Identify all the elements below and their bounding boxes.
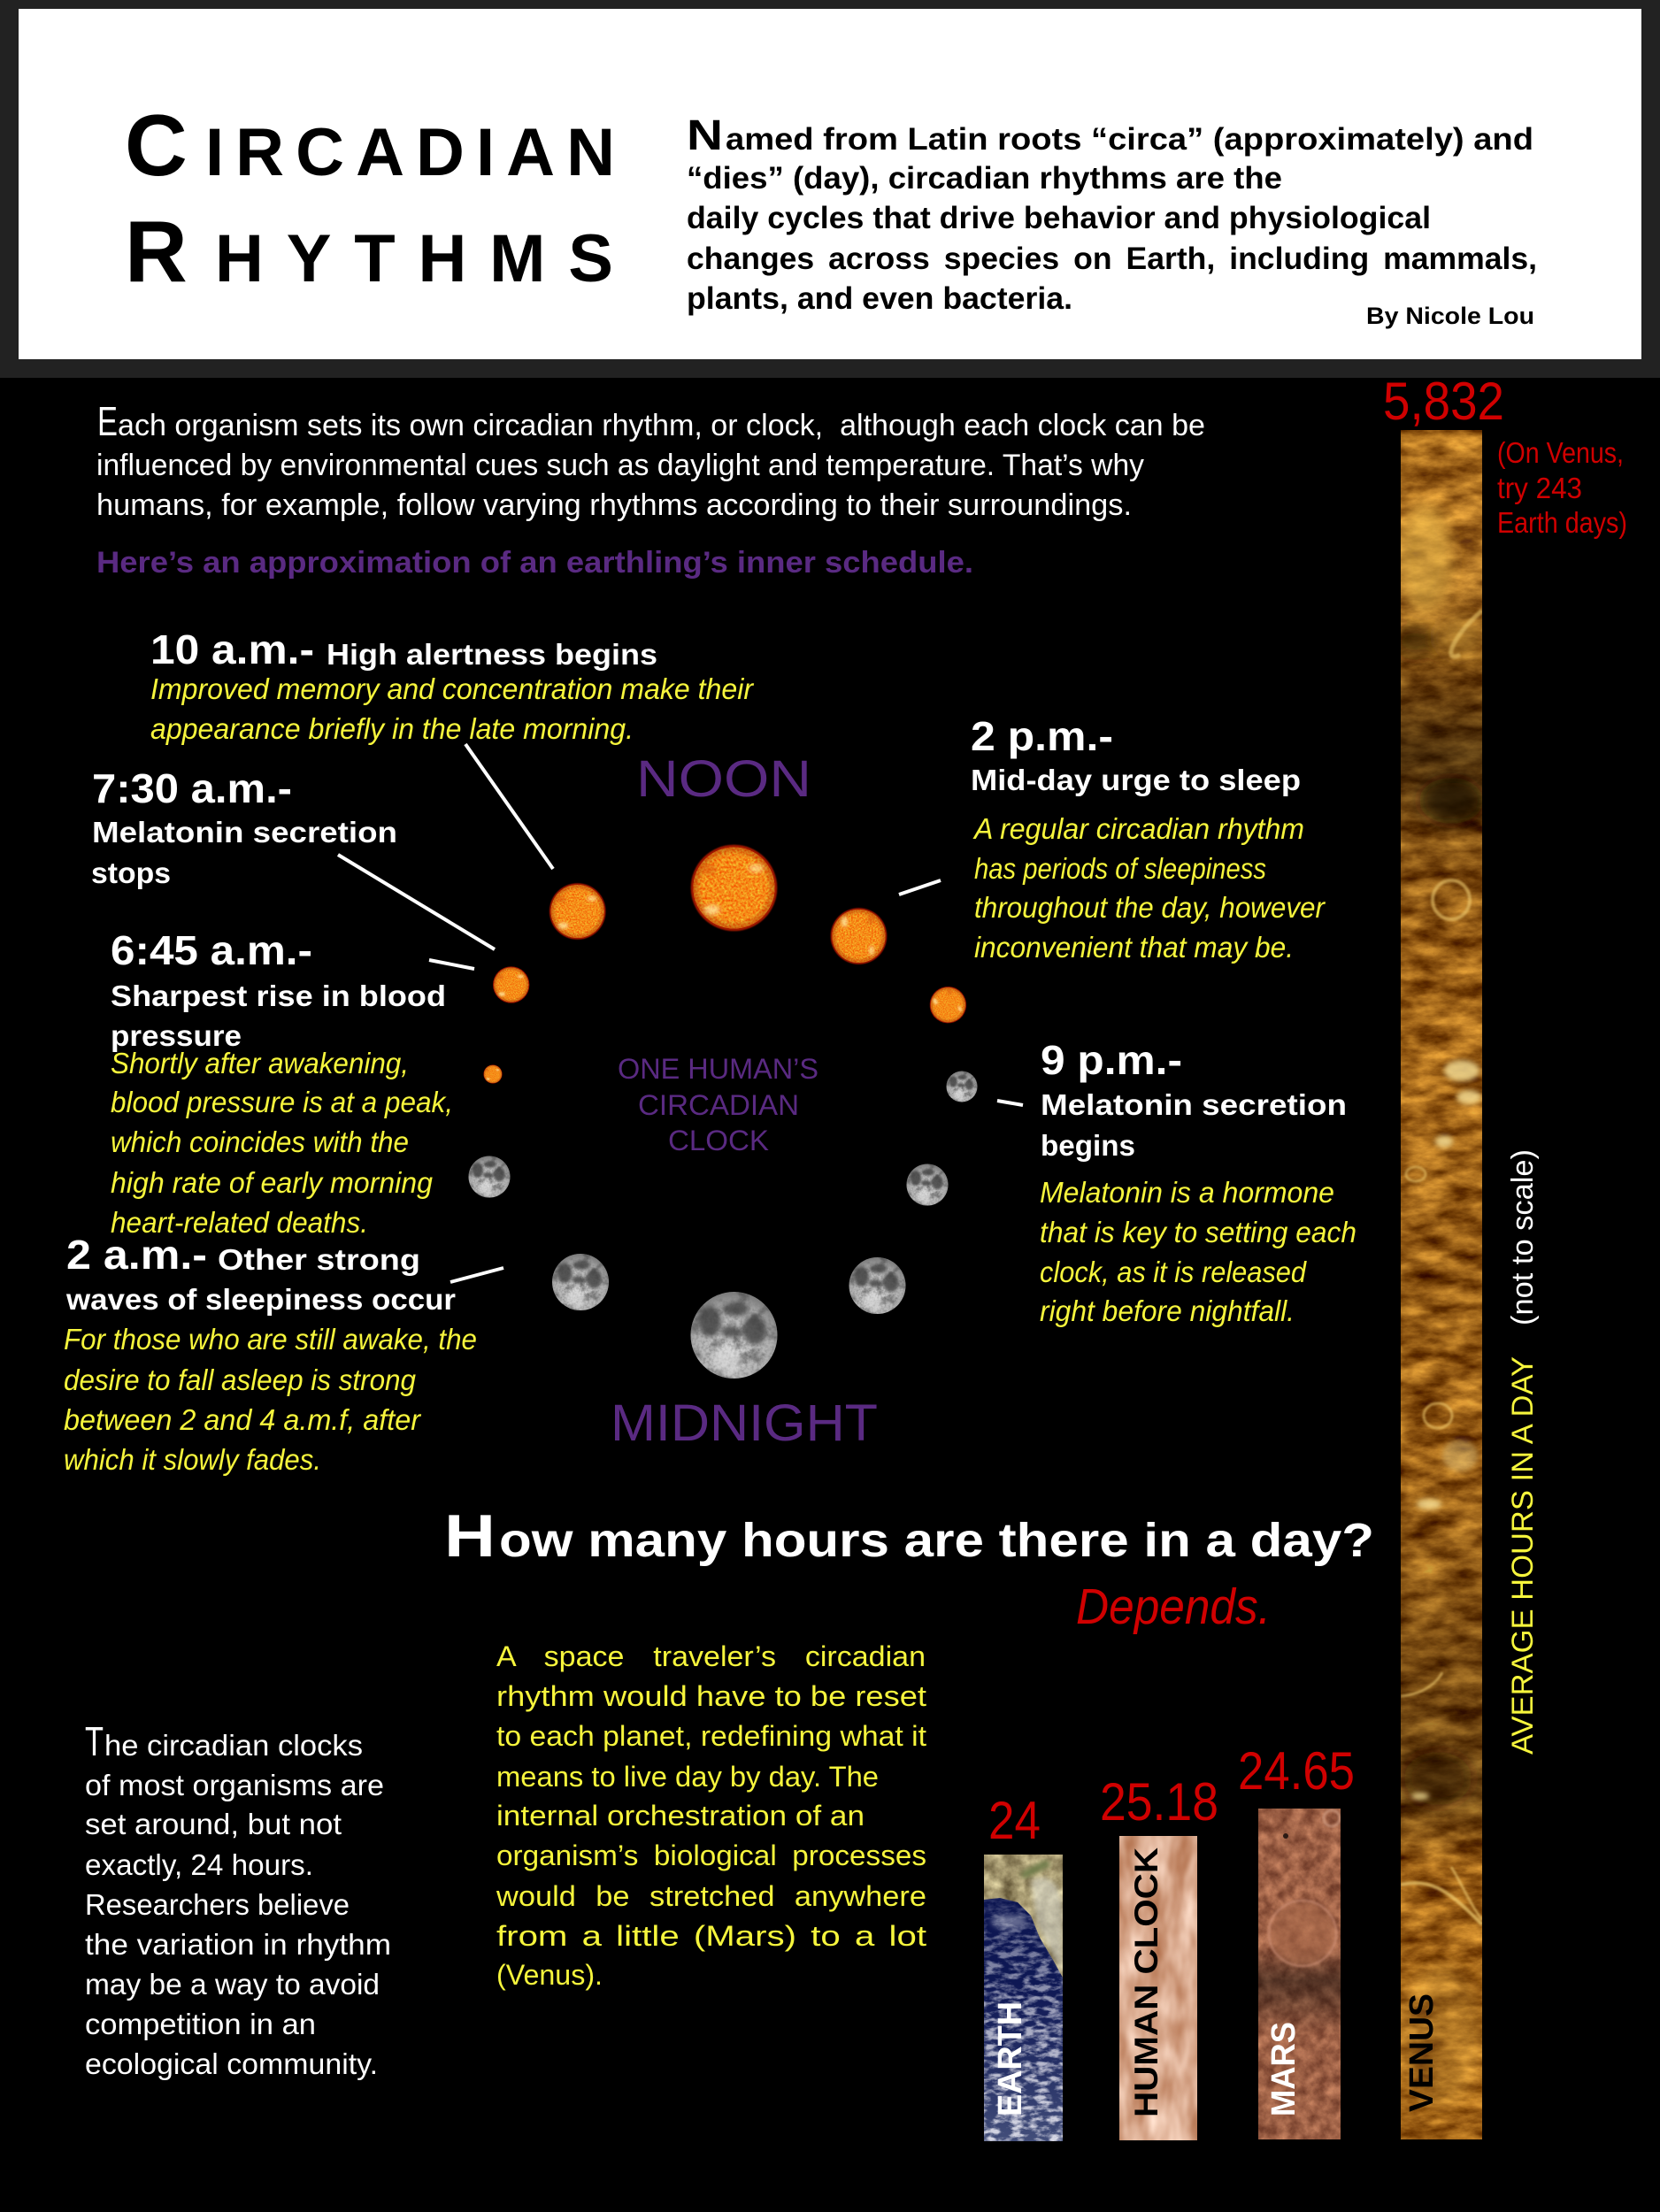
callout: 2 a.m.: between 2 and 4 a.m.f, after bbox=[64, 1403, 422, 1436]
title bbox=[125, 96, 615, 300]
clock centre label: CLOCK bbox=[668, 1125, 769, 1156]
intro paragraph: “dies” (day), circadian rhythms are the bbox=[687, 161, 1282, 196]
intro paragraph: daily cycles that drive behavior and physiological bbox=[687, 201, 1431, 235]
value: Mars: 24.65 bbox=[1238, 1741, 1355, 1801]
question heading: ow many hours are there in a day? bbox=[499, 1514, 1374, 1567]
callout: 2 p.m.: 2 p.m.- bbox=[971, 713, 1113, 759]
lead paragraph: influenced by environmental cues such as daylight and temperature. That’s why bbox=[96, 449, 1144, 482]
title: R bbox=[125, 203, 188, 300]
callout: 9 p.m.: that is key to setting each bbox=[1040, 1216, 1356, 1248]
title: C bbox=[125, 96, 188, 194]
callout: 2 a.m.: Other strong bbox=[218, 1243, 420, 1276]
callout: 9 p.m.: 9 p.m.- bbox=[1041, 1037, 1182, 1083]
bar: Mars bbox=[1258, 1809, 1341, 2139]
clock centre label: ONE HUMAN’S bbox=[618, 1053, 818, 1085]
bar: human clock bbox=[1119, 1836, 1197, 2140]
yellow paragraph: would be stretched anywhere bbox=[496, 1880, 926, 1912]
lead paragraph bbox=[96, 398, 1205, 522]
left paragraph: set around, but not bbox=[85, 1808, 342, 1840]
callout: 2 a.m.: For those who are still awake, the bbox=[64, 1323, 477, 1356]
yellow paragraph: from a little (Mars) to a lot bbox=[496, 1920, 926, 1952]
left paragraph: may be a way to avoid bbox=[85, 1968, 380, 2001]
yellow paragraph: means to live day by day. The bbox=[496, 1761, 879, 1793]
callout: 6:45 a.m.: high rate of early morning bbox=[111, 1166, 434, 1199]
callout: 2 p.m.: has periods of sleepiness bbox=[974, 852, 1266, 885]
callout: 7:30 a.m. bbox=[91, 765, 495, 949]
yellow paragraph: to each planet, redefining what it bbox=[496, 1720, 926, 1752]
intro paragraph: amed from Latin roots “circa” (approximately) and bbox=[726, 122, 1533, 157]
left paragraph: of most organisms are bbox=[85, 1769, 384, 1801]
axis caption bbox=[1506, 1149, 1540, 1755]
callout: 2 p.m.: inconvenient that may be. bbox=[974, 931, 1294, 964]
Venus note: try 243 bbox=[1497, 472, 1582, 504]
left paragraph: competition in an bbox=[85, 2008, 316, 2040]
bar: Venus: VENUS bbox=[1403, 1993, 1441, 2112]
Venus note: (On Venus, bbox=[1497, 436, 1624, 469]
callout: 9 p.m.: Melatonin is a hormone bbox=[1040, 1176, 1334, 1209]
lead paragraph: E bbox=[97, 398, 118, 444]
intro paragraph: N bbox=[687, 112, 723, 159]
callout: 9 p.m.: Melatonin secretion bbox=[1041, 1088, 1347, 1121]
callout: 10 a.m.: High alertness begins bbox=[327, 638, 657, 671]
left paragraph: Researchers believe bbox=[85, 1888, 350, 1921]
question heading bbox=[444, 1502, 1374, 1570]
question heading: H bbox=[444, 1502, 496, 1570]
left paragraph: ecological community. bbox=[85, 2047, 378, 2080]
bar: Mars: MARS bbox=[1265, 2022, 1303, 2116]
yellow paragraph: internal orchestration of an bbox=[496, 1800, 865, 1832]
callout: 2 a.m.: which it slowly fades. bbox=[64, 1443, 321, 1476]
callout: 2 a.m. bbox=[64, 1232, 503, 1476]
purple subheading: Here’s an approximation of an earthling’s inner schedule. bbox=[96, 546, 973, 580]
callout: 6:45 a.m.: blood pressure is at a peak, bbox=[111, 1086, 453, 1118]
clock centre label: CIRCADIAN bbox=[638, 1089, 799, 1121]
callout: 2 a.m.: 2 a.m.- bbox=[66, 1232, 207, 1278]
title: IRCADIAN bbox=[205, 115, 615, 190]
bar: Earth bbox=[984, 1855, 1063, 2141]
intro paragraph: changes across species on Earth, including mammals, bbox=[687, 242, 1537, 276]
bar: Earth: EARTH bbox=[992, 2001, 1029, 2116]
callout: 10 a.m. bbox=[150, 626, 755, 869]
clock label: noon: NOON bbox=[636, 750, 811, 808]
left paragraph: he circadian clocks bbox=[104, 1729, 363, 1762]
left paragraph: T bbox=[85, 1718, 104, 1764]
intro paragraph: plants, and even bacteria. bbox=[687, 281, 1072, 316]
yellow paragraph: organism’s biological processes bbox=[496, 1839, 926, 1871]
yellow paragraph: rhythm would have to be reset bbox=[496, 1680, 926, 1712]
depends: Depends. bbox=[1076, 1578, 1271, 1635]
bar: human clock: HUMAN CLOCK bbox=[1128, 1847, 1164, 2117]
Venus big value: 5,832 bbox=[1383, 372, 1504, 431]
callout: 10 a.m.: Improved memory and concentration make their bbox=[150, 672, 755, 705]
left paragraph: the variation in rhythm bbox=[85, 1928, 391, 1961]
intro paragraph bbox=[687, 112, 1537, 316]
bar: Venus bbox=[1396, 430, 1483, 2139]
callout: 7:30 a.m.: Melatonin secretion bbox=[92, 816, 397, 849]
callout: 10 a.m.: appearance briefly in the late morning. bbox=[150, 712, 634, 745]
circadian clock suns bbox=[483, 845, 973, 1084]
callout: 2 a.m.: waves of sleepiness occur bbox=[65, 1283, 456, 1316]
circadian clock moons bbox=[469, 1071, 977, 1379]
callout: 6:45 a.m.: pressure bbox=[111, 1019, 242, 1052]
callout: 7:30 a.m.: stops bbox=[91, 856, 171, 889]
callout: 7:30 a.m.: 7:30 a.m.- bbox=[92, 765, 292, 811]
value: human clock: 25.18 bbox=[1100, 1772, 1218, 1832]
callout: 6:45 a.m.: heart-related deaths. bbox=[111, 1206, 368, 1239]
Venus note bbox=[1497, 436, 1627, 539]
callout: 6:45 a.m.: which coincides with the bbox=[111, 1125, 409, 1158]
callout: 9 p.m.: right before nightfall. bbox=[1040, 1294, 1295, 1327]
callout: 2 p.m. bbox=[899, 713, 1326, 964]
callout: 6:45 a.m.: Sharpest rise in blood bbox=[111, 979, 446, 1012]
yellow paragraph bbox=[496, 1640, 926, 1991]
value: Earth: 24 bbox=[988, 1791, 1041, 1850]
lead paragraph: humans, for example, follow varying rhythms according to their surroundings. bbox=[96, 488, 1132, 522]
callout: 6:45 a.m.: Shortly after awakening, bbox=[111, 1047, 409, 1079]
title: HYTHMS bbox=[215, 221, 613, 296]
clock label: midnight: MIDNIGHT bbox=[611, 1394, 878, 1452]
callout: 9 p.m.: clock, as it is released bbox=[1040, 1256, 1308, 1288]
left paragraph: exactly, 24 hours. bbox=[85, 1848, 313, 1881]
callout: 2 p.m.: Mid-day urge to sleep bbox=[971, 764, 1301, 796]
left paragraph bbox=[85, 1718, 391, 2080]
yellow paragraph: A space traveler’s circadian bbox=[496, 1640, 926, 1672]
callout: 2 p.m.: A regular circadian rhythm bbox=[972, 812, 1304, 845]
lead paragraph: ach organism sets its own circadian rhythm, or clock, although each clock can be bbox=[118, 409, 1205, 442]
callout: 10 a.m.: 10 a.m.- bbox=[150, 626, 314, 672]
callout: 6:45 a.m.: 6:45 a.m.- bbox=[111, 927, 312, 973]
callout: 2 p.m.: throughout the day, however bbox=[974, 891, 1326, 924]
axis caption: (not to scale) bbox=[1506, 1149, 1540, 1325]
byline: By Nicole Lou bbox=[1366, 303, 1534, 329]
callout: 9 p.m.: begins bbox=[1041, 1129, 1135, 1162]
Venus note: Earth days) bbox=[1497, 506, 1627, 539]
callout: 9 p.m. bbox=[997, 1037, 1356, 1327]
callout: 2 a.m.: desire to fall asleep is strong bbox=[64, 1363, 417, 1396]
callout: 6:45 a.m. bbox=[111, 927, 474, 1239]
clock centre label bbox=[618, 1053, 818, 1156]
axis caption: AVERAGE HOURS IN A DAY bbox=[1506, 1356, 1540, 1755]
header band bbox=[0, 0, 1660, 378]
yellow paragraph: (Venus). bbox=[496, 1959, 603, 1991]
